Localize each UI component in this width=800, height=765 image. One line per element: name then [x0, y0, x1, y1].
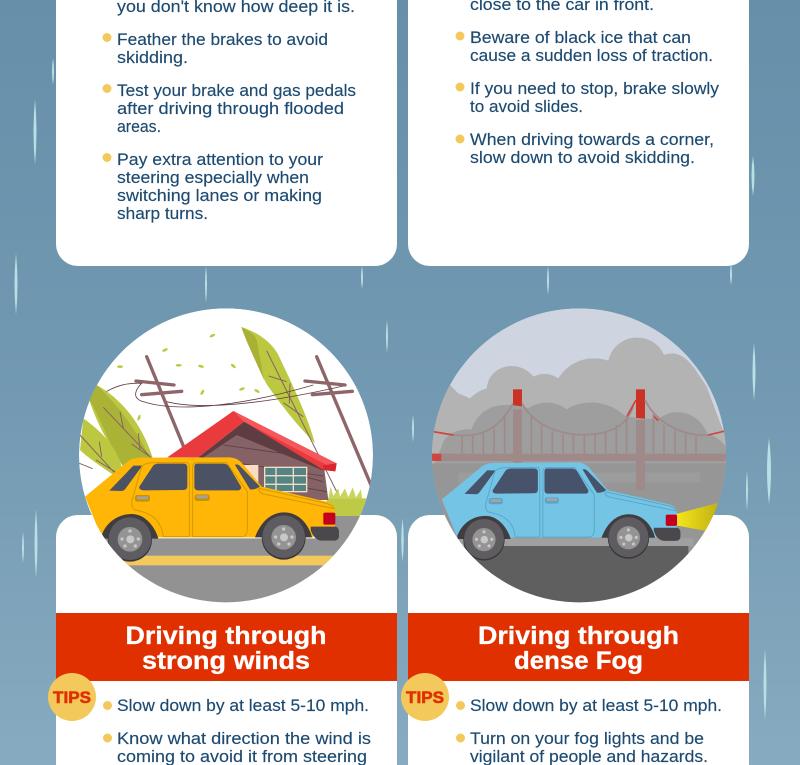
hangers — [462, 415, 696, 455]
tip list: snow and ice: If you need to stop, brake slowly — [470, 80, 720, 98]
badge: tips fog: TIPS — [406, 688, 444, 707]
tip list: snow and ice: slow down to avoid skidding. — [470, 149, 695, 167]
heading: driving through dense fog — [408, 613, 749, 681]
tip list: flooded roads: switching lanes or making — [117, 187, 322, 205]
tip list: flooded roads: Test your brake and gas pedals — [117, 82, 356, 100]
big leaves left — [89, 385, 153, 467]
panel: strong winds card — [56, 515, 397, 765]
tip list: strong winds: Slow down by at least 5-10 mph. — [117, 697, 369, 715]
tip list: flooded roads: Pay extra attention to your — [117, 151, 324, 169]
illustration: car in strong winds — [79, 308, 373, 602]
tip list: flooded roads: after driving through flooded — [117, 100, 344, 118]
tip list: flooded roads: skidding. — [117, 49, 188, 67]
back fog clouds — [427, 338, 737, 467]
badge: tips winds — [48, 673, 96, 721]
tip list: strong winds — [103, 697, 371, 765]
tip list: snow and ice — [456, 0, 720, 167]
tip list: flooded roads: areas. — [117, 118, 161, 136]
tip list: flooded roads: steering especially when — [117, 169, 309, 187]
tip list: snow and ice: Beware of black ice that can — [470, 29, 691, 47]
panel: flooded roads tips — [56, 0, 397, 266]
tip list: flooded roads: sharp turns. — [117, 205, 208, 223]
front fog clouds — [433, 402, 730, 500]
tip list: snow and ice: When driving towards a corner, — [470, 131, 714, 149]
roof — [167, 411, 337, 471]
big leaf right — [241, 327, 315, 443]
tip list: snow and ice: cause a sudden loss of traction. — [470, 47, 713, 65]
illustration: car in dense fog — [432, 308, 726, 602]
heading: driving through strong winds — [56, 613, 397, 681]
heading: driving through strong winds: Driving through — [126, 622, 326, 650]
grass — [328, 487, 362, 498]
car yellow — [85, 457, 339, 562]
car blue — [442, 463, 680, 561]
leaves flying — [116, 334, 260, 420]
heading: driving through dense fog: Driving through — [478, 622, 679, 650]
heading: driving through strong winds: strong winds — [142, 647, 310, 675]
tip list: dense fog: Slow down by at least 5-10 mph. — [470, 697, 722, 715]
road — [105, 516, 360, 602]
tip list: flooded roads: Feather the brakes to avoid — [117, 31, 328, 49]
tip list: dense fog: Turn on your fog lights and be — [470, 730, 704, 748]
road — [453, 538, 693, 547]
window — [265, 467, 307, 492]
utility poles — [136, 357, 372, 487]
heading: driving through dense fog: dense Fog — [514, 647, 643, 675]
road stripe — [121, 556, 334, 566]
power lines — [107, 383, 343, 407]
badge: tips winds: TIPS — [53, 688, 91, 707]
house wall — [198, 422, 328, 500]
badge: tips fog — [401, 673, 449, 721]
bridge towers — [513, 409, 522, 466]
panel: snow and ice tips — [408, 0, 749, 266]
bridge deck — [432, 454, 728, 461]
bridge towers upper — [513, 389, 522, 406]
suspension cables — [453, 400, 708, 436]
tip list: dense fog — [456, 697, 722, 765]
tip list: strong winds: Know what direction the wind is — [117, 730, 371, 748]
headlight beam — [676, 502, 720, 532]
panel: dense fog card — [408, 515, 749, 765]
tip list: flooded roads — [102, 0, 356, 223]
tip list: snow and ice: to avoid slides. — [470, 98, 583, 116]
